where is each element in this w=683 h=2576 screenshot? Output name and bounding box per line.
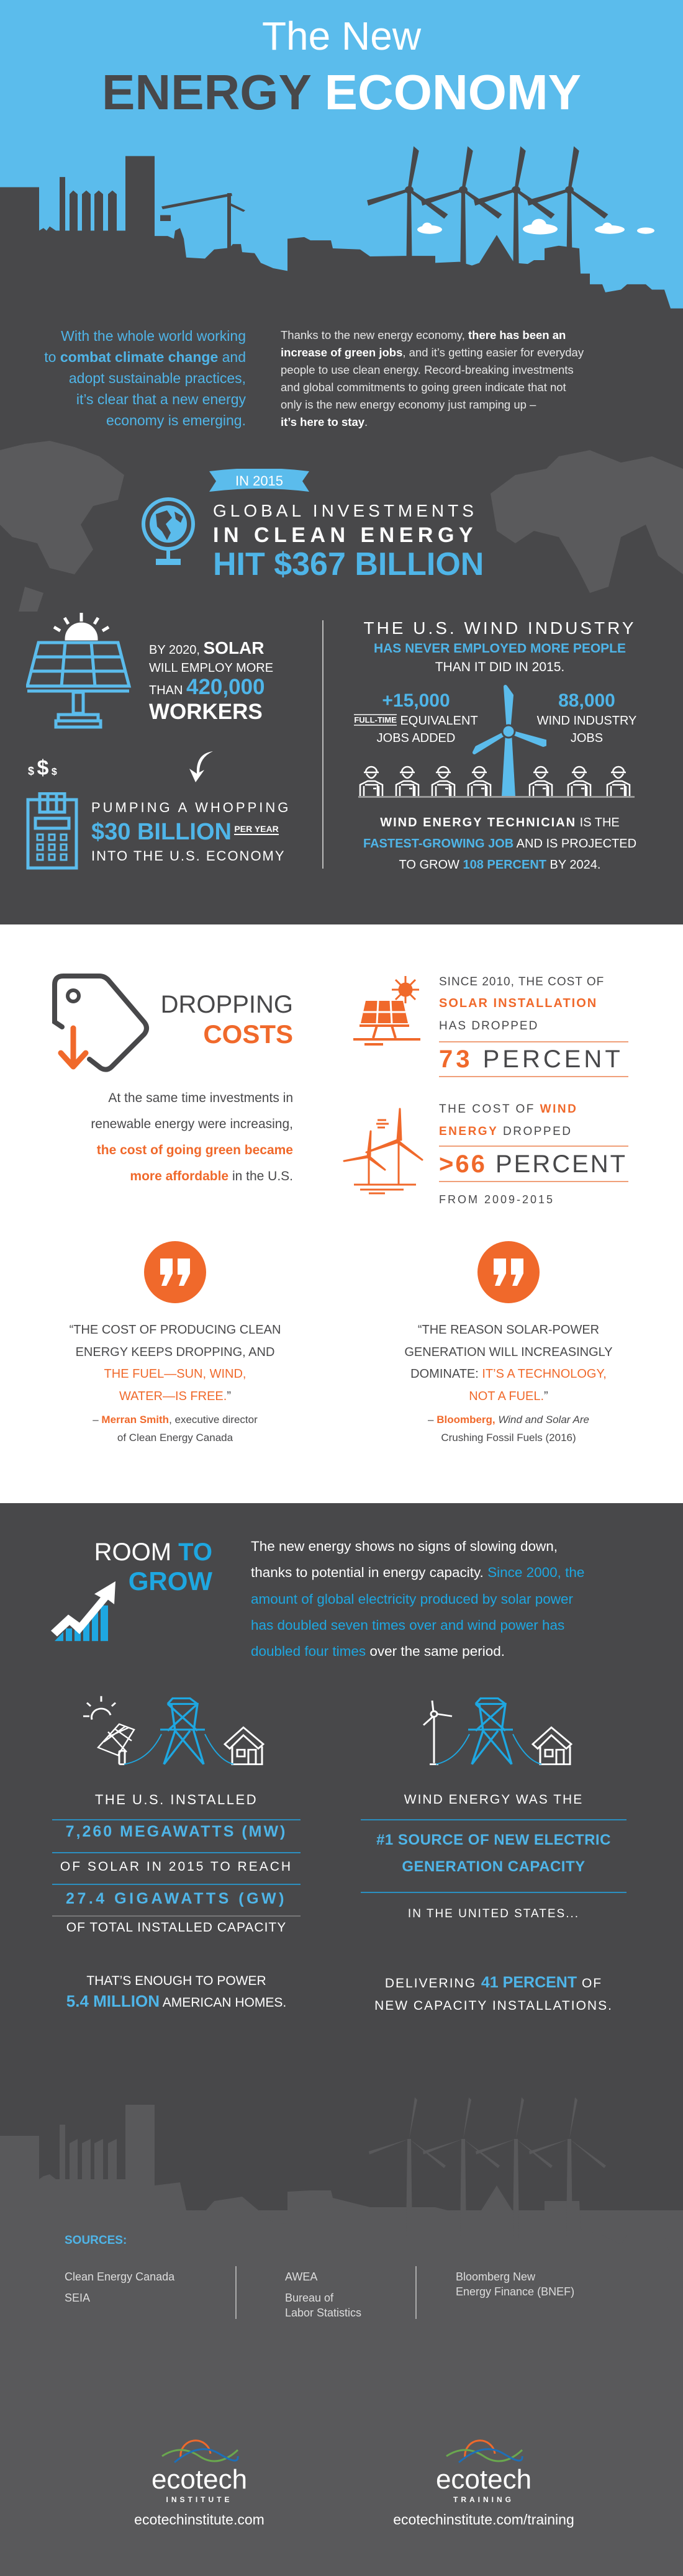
stat: wind cost dropped: >66 PERCENT xyxy=(439,1150,627,1178)
intro text right: and global commitments to going green indicate that not xyxy=(281,381,566,394)
stat: $30 billion: INTO THE U.S. ECONOMY xyxy=(91,848,286,864)
stat: US solar installed: THE U.S. INSTALLED xyxy=(95,1792,258,1807)
stat: solar cost dropped: SOLAR INSTALLATION xyxy=(439,997,597,1010)
world map background xyxy=(0,441,683,612)
icon: orange solar panel xyxy=(353,976,420,1046)
logo: ecotech training: ecotech xyxy=(436,2464,531,2495)
intro text right: it’s here to stay. xyxy=(281,415,368,428)
sources column 3: Bloomberg New xyxy=(456,2271,535,2283)
stat: US solar installed: 27.4 GIGAWATTS (GW) xyxy=(66,1890,287,1907)
quote: Bloomberg: GENERATION WILL INCREASINGLY xyxy=(404,1345,613,1359)
stat: wind industry heading: HAS NEVER EMPLOYED MORE PEOPLE xyxy=(374,641,626,656)
stat: 41 percent: DELIVERING 41 PERCENT OF xyxy=(385,1974,602,1991)
stat: wind #1 source: GENERATION CAPACITY xyxy=(402,1858,586,1875)
icon: globe xyxy=(142,497,195,565)
sources column 2 xyxy=(285,2266,361,2323)
quote: Bloomberg: Crushing Fossil Fuels (2016) xyxy=(441,1432,576,1444)
sources column 1 xyxy=(65,2266,174,2308)
stat: wind energy technician xyxy=(363,816,636,872)
heading: room to grow: GROW xyxy=(129,1566,212,1596)
stat: wind industry heading: THE U.S. WIND INDUSTRY xyxy=(363,618,636,638)
stat: solar cost dropped: HAS DROPPED xyxy=(439,1019,538,1033)
text: room to grow paragraph: The new energy shows no signs of slowing down, xyxy=(251,1539,558,1554)
banner: in 2015 xyxy=(209,469,309,492)
background: sky section xyxy=(0,0,683,314)
faded skyline xyxy=(0,2086,683,2254)
stat: US solar installed xyxy=(52,1792,301,1935)
quote: Merran Smith: “THE COST OF PRODUCING CLEAN xyxy=(70,1323,281,1337)
logo: ecotech training: TRAINING xyxy=(453,2495,514,2504)
text: costs paragraph xyxy=(91,1091,293,1183)
icon: quote bubble right xyxy=(477,1241,540,1303)
logo: ecotech training xyxy=(378,2435,589,2528)
text: costs paragraph: more affordable in the U.S. xyxy=(130,1169,293,1183)
stat: solar workers: THAN 420,000 xyxy=(149,675,265,699)
quote: Bloomberg: NOT A FUEL.” xyxy=(469,1390,548,1403)
title: ENERGY ECONOMY xyxy=(102,65,581,120)
intro text right: people to use clean energy. Record-breaking investments xyxy=(281,363,574,376)
stat: solar workers xyxy=(149,638,273,724)
icon row: workers xyxy=(358,766,635,798)
stat: US solar installed: 7,260 MEGAWATTS (MW) xyxy=(66,1823,287,1840)
logo: ecotech institute: ecotech xyxy=(152,2464,247,2495)
stat: 88,000 jobs: WIND INDUSTRY xyxy=(537,714,636,728)
sources column 3: Energy Finance (BNEF) xyxy=(456,2285,574,2298)
intro text left: economy is emerging. xyxy=(106,412,246,428)
background: lower footer section xyxy=(0,2210,683,2576)
stat: wind cost dropped: THE COST OF WIND xyxy=(439,1103,577,1116)
stat: solar workers: WILL EMPLOY MORE xyxy=(149,661,273,675)
stat: US solar installed: OF SOLAR IN 2015 TO REACH xyxy=(60,1860,292,1874)
sources column 2: Labor Statistics xyxy=(285,2307,361,2319)
stat: solar cost dropped: SINCE 2010, THE COST OF xyxy=(439,975,604,988)
quote: Merran Smith: WATER—IS FREE.” xyxy=(119,1390,231,1403)
text: costs paragraph: the cost of going green became xyxy=(97,1143,293,1157)
quote: Merran Smith: – Merran Smith, executive director xyxy=(93,1414,258,1426)
stat: US solar installed: OF TOTAL INSTALLED CAPACITY xyxy=(66,1920,286,1935)
stat: solar cost dropped xyxy=(439,975,628,1077)
heading: dropping costs xyxy=(161,991,293,1049)
stat: wind cost dropped: FROM 2009-2015 xyxy=(439,1193,554,1206)
intro text right: increase of green jobs, and it’s getting easier for everyday xyxy=(281,346,584,359)
sources column 1: SEIA xyxy=(65,2292,90,2304)
intro text left: With the whole world working xyxy=(61,328,246,344)
stat: +15,000 jobs xyxy=(354,690,478,745)
intro text right: Thanks to the new energy economy, there has been an xyxy=(281,328,566,341)
text: room to grow paragraph: doubled four times over the same period. xyxy=(251,1643,505,1659)
logo: ecotech institute xyxy=(106,2435,292,2528)
banner: in 2015: IN 2015 xyxy=(235,473,283,489)
text: costs paragraph: renewable energy were increasing, xyxy=(91,1117,293,1131)
quote: Bloomberg xyxy=(404,1323,613,1444)
stat: wind industry heading: THAN IT DID IN 2015. xyxy=(435,660,564,674)
sources column 2: AWEA xyxy=(285,2271,317,2283)
stat: wind #1 source: WIND ENERGY WAS THE xyxy=(404,1792,583,1807)
icon: quote bubble left xyxy=(144,1241,206,1303)
quote: Merran Smith: of Clean Energy Canada xyxy=(117,1432,233,1444)
headline: global investments: IN CLEAN ENERGY xyxy=(213,523,477,547)
stat: 5.4 million homes: 5.4 MILLION AMERICAN HOMES. xyxy=(66,1992,286,2010)
logo: ecotech training: ecotechinstitute.com/training xyxy=(393,2511,574,2528)
quote: Merran Smith: ENERGY KEEPS DROPPING, AND xyxy=(76,1345,274,1359)
quote: Merran Smith: THE FUEL—SUN, WIND, xyxy=(104,1367,246,1381)
logo: ecotech institute: ecotechinstitute.com xyxy=(134,2511,265,2528)
stat: 41 percent xyxy=(374,1974,613,2013)
text: room to grow paragraph xyxy=(251,1539,584,1659)
stat: wind industry heading xyxy=(363,618,636,674)
headline: global investments xyxy=(213,501,484,582)
quote: Bloomberg: – Bloomberg, Wind and Solar Are xyxy=(428,1414,589,1426)
stat: solar cost dropped: 73 PERCENT xyxy=(439,1046,623,1073)
headline: global investments: GLOBAL INVESTMENTS xyxy=(213,501,477,520)
stat: +15,000 jobs: +15,000 xyxy=(382,690,450,711)
text: room to grow paragraph: thanks to potential in energy capacity. Since 2000, the xyxy=(251,1565,584,1580)
icon: orange wind turbines xyxy=(343,1108,423,1195)
intro text right: only is the new energy economy just ramping up – xyxy=(281,398,536,411)
intro text left xyxy=(44,328,246,428)
stat: wind #1 source: #1 SOURCE OF NEW ELECTRIC xyxy=(376,1832,611,1848)
stat: $30 billion xyxy=(91,800,291,864)
stat: 88,000 jobs: JOBS xyxy=(571,731,603,745)
intro text right xyxy=(281,328,584,428)
stat: wind cost dropped: ENERGY DROPPED xyxy=(439,1125,572,1138)
sources column 3 xyxy=(456,2269,574,2299)
background: white costs section xyxy=(0,924,683,1503)
icon: dollar signs: $ $ $ xyxy=(28,756,57,780)
heading: dropping costs: COSTS xyxy=(203,1019,293,1049)
stat: wind #1 source: IN THE UNITED STATES... xyxy=(408,1907,579,1920)
stat: 5.4 million homes: THAT’S ENOUGH TO POWER xyxy=(86,1974,266,1988)
stat: wind #1 source xyxy=(361,1792,626,1920)
quote: Merran Smith xyxy=(70,1323,281,1444)
icon row: solar to grid to home xyxy=(83,1696,265,1765)
sources column 2: Bureau of xyxy=(285,2292,333,2304)
intro text left: it’s clear that a new energy xyxy=(76,391,246,407)
stat: 41 percent: NEW CAPACITY INSTALLATIONS. xyxy=(374,1999,613,2013)
arrow: curved down xyxy=(189,751,213,782)
intro text left: adopt sustainable practices, xyxy=(69,370,246,386)
sources column 1: Clean Energy Canada xyxy=(65,2271,174,2283)
stat: 88,000 jobs xyxy=(536,690,636,745)
title xyxy=(102,14,581,120)
skyline illustration xyxy=(0,147,683,314)
stat: 88,000 jobs: 88,000 xyxy=(558,690,615,711)
stat: wind energy technician: TO GROW 108 PERCENT BY 2024. xyxy=(399,858,600,872)
stat: solar workers: BY 2020, SOLAR xyxy=(149,638,264,658)
stat: 5.4 million homes xyxy=(66,1974,286,2010)
icon: solar panel xyxy=(26,613,132,729)
title: The New xyxy=(262,14,421,58)
sources heading: SOURCES: xyxy=(65,2234,127,2247)
stat: $30 billion: PUMPING A WHOPPING xyxy=(91,800,291,815)
heading: room to grow: ROOM TO xyxy=(94,1539,212,1566)
vertical divider xyxy=(322,620,323,869)
stat: +15,000 jobs: JOBS ADDED xyxy=(377,731,455,745)
stat: wind cost dropped xyxy=(439,1103,628,1206)
stat: +15,000 jobs: FULL-TIME EQUIVALENT xyxy=(354,714,478,728)
text: costs paragraph: At the same time investments in xyxy=(108,1091,293,1105)
text: room to grow paragraph: has doubled seven times over and wind power has xyxy=(251,1617,564,1633)
stat: wind energy technician: FASTEST-GROWING JOB AND IS PROJECTED xyxy=(363,837,636,851)
headline: global investments: HIT $367 BILLION xyxy=(213,546,484,582)
text: room to grow paragraph: amount of global electricity produced by solar power xyxy=(251,1591,573,1607)
logo: ecotech institute: INSTITUTE xyxy=(166,2495,232,2504)
stat: wind energy technician: WIND ENERGY TECHNICIAN IS THE xyxy=(380,816,620,829)
stat: solar workers: WORKERS xyxy=(149,700,263,724)
quote: Bloomberg: “THE REASON SOLAR-POWER xyxy=(418,1323,599,1337)
stat: $30 billion: $30 BILLION PER YEAR xyxy=(91,819,279,845)
icon: growth chart xyxy=(51,1581,115,1642)
heading: room to grow xyxy=(94,1539,212,1596)
heading: dropping costs: DROPPING xyxy=(161,991,293,1018)
icon: calculator xyxy=(26,792,78,869)
intro text left: to combat climate change and xyxy=(44,349,246,365)
icon row: wind to grid to home xyxy=(423,1697,572,1765)
icon: big turbine xyxy=(473,685,546,796)
quote: Bloomberg: DOMINATE: IT’S A TECHNOLOGY, xyxy=(410,1367,607,1381)
icon: price tag xyxy=(52,974,149,1072)
